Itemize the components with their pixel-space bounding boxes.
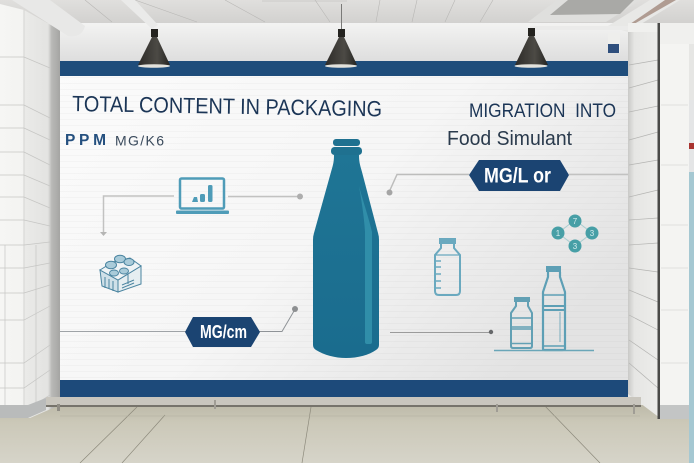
pendant lamp centre (325, 4, 357, 68)
connector: laptop to box (100, 196, 174, 236)
floor rail (46, 397, 641, 414)
pendant lamp left (138, 29, 170, 68)
icon: graduated bottle (435, 238, 460, 295)
connector: bottle to small bottles (390, 330, 493, 334)
connector: mg/cm badge (60, 306, 298, 332)
ceiling vent (528, 0, 680, 32)
icon: laptop chart (176, 178, 229, 214)
heading: food simulant: Food Simulant (447, 127, 572, 150)
icon: molecule: 7 (573, 217, 578, 226)
bottle (313, 139, 379, 358)
ceiling pipe (121, 0, 158, 29)
shelf line (494, 350, 594, 352)
top band (60, 61, 628, 76)
icon: molecule (552, 214, 598, 252)
right wall and column (608, 23, 694, 463)
badge: mg/l or: MG/L or (484, 164, 551, 188)
heading: total content in packaging: TOTAL CONTENT IN PACKAGING (72, 91, 382, 121)
label: mg/k6: MG/K6 (115, 132, 164, 148)
icon: molecule: 1 (556, 229, 561, 238)
pendant lamp right (514, 28, 548, 68)
icon: molecule: 3 (573, 242, 578, 251)
connector: bottle to mg/l badge (386, 174, 628, 196)
ceiling duct left (12, 0, 85, 36)
icon: molecule: 3 (590, 229, 595, 238)
connector: laptop to bottle (228, 194, 303, 200)
badge: mg/cm (185, 317, 260, 347)
label: ppm: PPM (65, 132, 106, 149)
bottom band (60, 380, 628, 397)
heading: migration into: MIGRATION INTO (469, 100, 616, 122)
icon: box of packaging (100, 255, 141, 292)
wall banner panel (60, 61, 628, 397)
icon: tall bottle (543, 266, 565, 350)
badge: mg/l or (469, 160, 569, 191)
icon: small bottle (511, 297, 532, 348)
badge: mg/cm: MG/cm (200, 321, 247, 342)
left tiled wall (0, 4, 60, 418)
